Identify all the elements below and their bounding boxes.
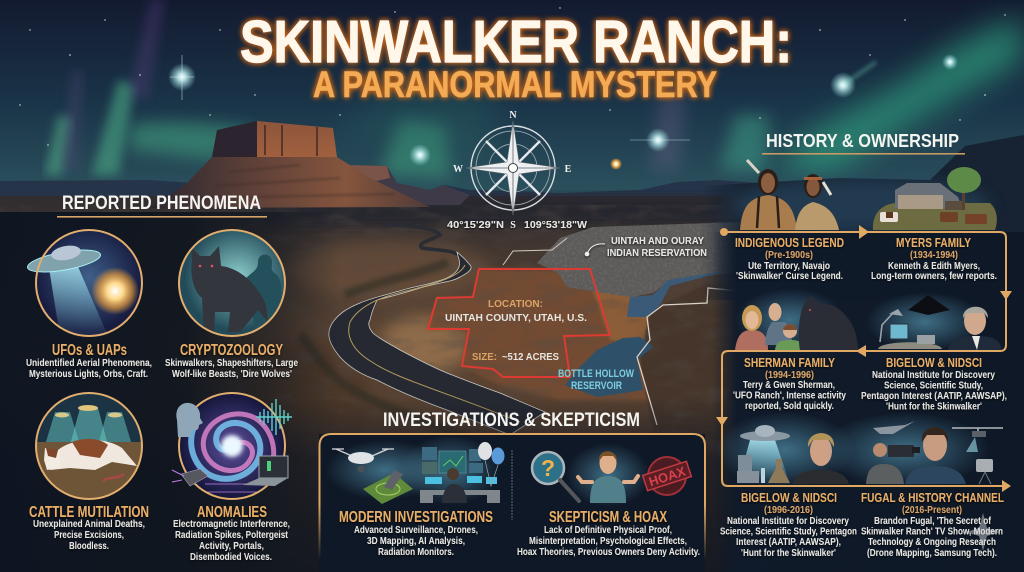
text: anomalies: Electromagnetic Interference, [173,518,290,530]
text: modern investigations: Advanced Surveillance, Drones, [354,524,478,536]
text: modern investigations: 3D Mapping, AI Analysis, [367,535,465,547]
text: bigelow and nidsci lower: National Institute for Discovery [727,515,849,527]
sound wave [256,399,292,435]
compass rose [453,110,572,215]
title: A PARANORMAL MYSTERY [313,64,717,105]
text: bigelow and nidsci lower: 'Hunt for the Skinwalker' [741,547,836,559]
text: sherman family: (1994-1996) [765,369,814,381]
icon: hoax stamp [643,457,691,495]
coordinates: S [510,220,516,231]
text: modern investigations [339,509,493,558]
text: UFOs and UAPs [26,342,152,380]
aurora glow [45,0,1024,178]
text: bigelow and nidsci lower: (1996-2016) [764,504,813,516]
text: cryptozoology: Skinwalkers, Shapeshifters, Large [165,357,298,369]
text: skepticism and hoax [517,509,700,558]
bright lights in the sky [168,54,958,170]
coordinates: 40°15'29"N [447,219,504,231]
compass rose: W [453,164,463,175]
panel: history and ownership [715,131,1012,559]
ranch boundary: LOCATION: [488,298,543,310]
text: sherman family: Terry & Gwen Sherman, [743,379,835,391]
coordinates [447,219,587,231]
panel: investigations and skepticism [320,410,705,560]
text: sherman family: 'UFO Ranch', Intense activity [733,390,846,402]
icon: magnifying glass with question mark: ? [541,455,555,481]
sandy terrain [290,240,490,300]
illustration: desk and triangular craft [865,292,1002,352]
illustration: operator and monitors [400,435,500,505]
ranch boundary: SIZE: [472,351,497,363]
text: skepticism and hoax: Lack of Definitive Physical Proof, [544,524,672,536]
illustration: saucer lab and scientist [715,412,855,488]
winding road [300,225,545,440]
ranch boundary: ~512 ACRES [502,351,559,363]
text: anomalies [173,504,290,563]
stars [19,7,1006,146]
text: anomalies: ANOMALIES [197,504,267,521]
text: cattle mutilation: Bloodless. [69,540,109,552]
heading: investigations and skepticism: INVESTIGATIONS & SKEPTICISM [383,410,640,431]
text: UFOs and UAPs: Mysterious Lights, Orbs, Craft. [29,368,148,380]
panel: reported phenomena [26,193,298,563]
title [240,9,792,105]
text: indigenous legend: (Pre-1900s) [765,249,813,261]
text: bigelow and nidsci upper: 'Hunt for the Skinwalker' [886,400,982,412]
text: cattle mutilation: CATTLE MUTILATION [29,504,149,521]
title: SKINWALKER RANCH: [240,9,792,75]
text: bigelow and nidsci lower: Science, Scientific Study, Pentagon [720,526,857,538]
text: bigelow and nidsci lower [720,490,857,559]
map label: reservoir: BOTTLE HOLLOW [558,368,634,380]
icon: hoax stamp: HOAX [647,463,688,489]
text: UFOs and UAPs: UFOs & UAPs [52,342,127,359]
text: UFOs and UAPs: Unidentified Aerial Phenomena, [26,357,152,369]
text: sherman family: SHERMAN FAMILY [744,355,835,370]
map label: reservoir [558,368,634,392]
map label: reservation [585,235,707,259]
text: fugal and history channel: Brandon Fugal, 'The Secret of [874,515,991,527]
icon: UFO and orb [26,230,142,336]
text: bigelow and nidsci lower: Interest (AATIP, AAWSAP), [736,536,841,548]
icon: anomalies vortex [172,393,292,499]
text: bigelow and nidsci lower: BIGELOW & NIDSCI [741,490,837,505]
dark eastern land [640,280,745,440]
text: cattle mutilation: Unexplained Animal Deaths, [33,518,145,530]
text: indigenous legend [735,235,844,282]
icon: wolf and shapeshifter [179,230,285,336]
illustration: ranch house and cattle [873,167,997,230]
panel backdrop: reported phenomena [0,212,340,572]
text: sherman family [733,355,846,412]
ranch boundary: UINTAH COUNTY, UTAH, U.S. [445,312,587,324]
icon: magnifying glass with question mark [532,452,579,501]
text: skepticism and hoax: Misinterpretation, Psychological Effects, [529,535,687,547]
illustration: indigenous figures [740,160,839,230]
text: cryptozoology: Wolf-like Beasts, 'Dire Wolves' [172,368,292,380]
text: myers family [871,235,997,282]
ranch boundary [428,269,610,377]
text: sherman family: reported, Sold quickly. [745,400,834,412]
text: modern investigations: MODERN INVESTIGATIONS [339,509,493,526]
text: fugal and history channel: (2016-Present) [902,504,962,516]
mesa rock formation [150,121,470,208]
timeline arrow path [716,225,1012,492]
map label: reservation: UINTAH AND OURAY [611,235,704,247]
text: fugal and history channel [861,490,1004,559]
map label: reservoir: RESERVOIR [571,380,622,392]
map terrain and water [108,205,738,430]
icon: balloons [478,442,504,486]
backdrop: bottom fade [0,398,1024,572]
illustration: drone and scanning pad [325,440,445,504]
text: cryptozoology [165,342,298,380]
compass rose: E [565,164,572,175]
illustration: shrugging man [566,443,650,507]
panel backdrop: investigations [319,434,705,572]
text: anomalies: Disembodied Voices. [190,551,272,563]
reservoir water [627,270,730,317]
coordinates: 109°53'18"W [524,219,587,231]
heading: history and ownership: HISTORY & OWNERSHIP [766,131,959,151]
text: myers family: (1934-1994) [910,249,958,261]
text: bigelow and nidsci upper: BIGELOW & NIDSCI [886,355,982,370]
frame [320,434,705,560]
text: skepticism and hoax: Hoax Theories, Previous Owners Deny Activity. [517,546,700,558]
laptop [259,456,288,478]
distant ridges [0,180,760,215]
text: bigelow and nidsci upper: National Institute for Discovery [872,369,995,381]
map label: reservation: INDIAN RESERVATION [607,247,707,259]
text: anomalies: Radiation Spikes, Poltergeist [175,529,288,541]
panel backdrop: history and ownership [700,135,1024,572]
text: myers family: Kenneth & Edith Myers, [888,260,980,272]
text: myers family: MYERS FAMILY [896,235,971,250]
illustration: sherman family and wolf [735,288,858,352]
sensor box [181,469,208,486]
illustration: film crew and drones [820,412,1003,488]
text: bigelow and nidsci upper [861,355,1007,412]
heading: reported phenomena: REPORTED PHENOMENA [62,193,261,214]
text: bigelow and nidsci upper: Science, Scientific Study, [884,380,983,392]
text: myers family: Long-term owners, few reports. [871,270,997,282]
head silhouette [176,403,203,437]
icon: sparkle watermark [966,513,1000,551]
text: indigenous legend: Ute Territory, Navajo [748,260,830,272]
text: cattle mutilation: Precise Excisions, [54,529,124,541]
icon: mutilated cow [36,393,142,499]
text: cattle mutilation [29,504,149,552]
compass rose: N [509,110,517,121]
text: anomalies: Activity, Portals, [199,540,264,552]
reservation land [537,222,740,297]
text: indigenous legend: 'Skinwalker' Curse Legend. [736,270,843,282]
text: skepticism and hoax: SKEPTICISM & HOAX [549,509,667,526]
text: modern investigations: Radiation Monitors. [378,546,454,558]
text: indigenous legend: INDIGENOUS LEGEND [735,235,844,250]
text: cryptozoology: CRYPTOZOOLOGY [180,342,283,359]
